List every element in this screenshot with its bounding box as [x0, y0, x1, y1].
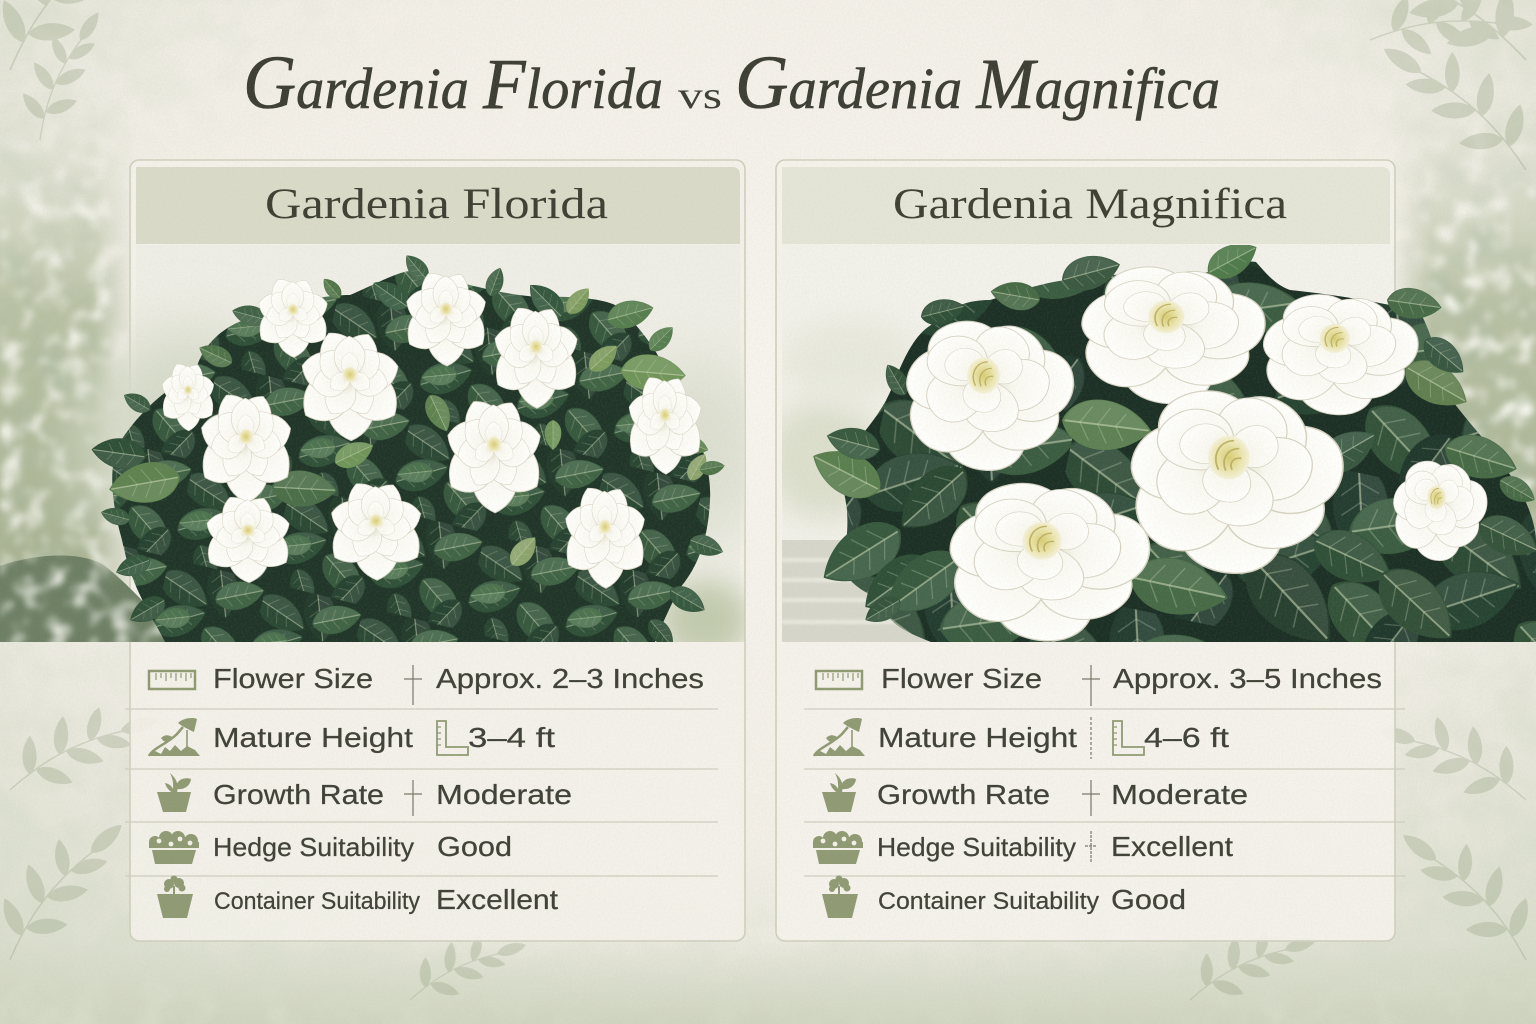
row: flower size [149, 663, 704, 705]
row: flower size: Approx. 3–5 Inches [1113, 663, 1382, 694]
title [243, 41, 1220, 125]
row: container suitability: Container Suitability [214, 888, 420, 915]
row: flower size: Flower Size [213, 663, 373, 694]
row: hedge suitability: Excellent [1111, 831, 1233, 862]
stone path [782, 540, 935, 642]
blurred foliage right of the panels [1396, 122, 1536, 539]
row: growth rate [157, 773, 572, 816]
row: container suitability [157, 876, 558, 918]
row: growth rate [822, 773, 1248, 816]
panel header [136, 167, 740, 244]
row: mature height: 4–6 ft [1144, 722, 1229, 753]
individual leaves [89, 250, 726, 653]
panel frame [776, 160, 1395, 941]
title: vs [678, 75, 722, 117]
row: mature height [149, 718, 555, 756]
row: mature height: Mature Height [213, 722, 413, 753]
photo: large gardenia shrub [765, 234, 1536, 663]
row: growth rate: Growth Rate [877, 779, 1050, 810]
row: mature height: Mature Height [878, 722, 1077, 753]
panel header: Gardenia Magnifica [893, 181, 1287, 228]
row: hedge suitability: Good [437, 831, 512, 862]
panel header: Gardenia Florida [265, 181, 608, 228]
row: hedge suitability [149, 831, 512, 864]
individual leaves [804, 234, 1536, 663]
photo: small gardenia shrub [0, 245, 770, 660]
panel: Gardenia Magnifica [765, 160, 1536, 941]
row: flower size: Flower Size [881, 663, 1042, 694]
white gardenia blooms [157, 266, 709, 588]
misty far bank [782, 399, 874, 527]
comparison table: Gardenia Magnifica [804, 663, 1405, 918]
row: growth rate: Moderate [436, 779, 572, 810]
title: Gardenia Florida [243, 41, 663, 125]
blurred foliage left of the panels [0, 122, 129, 587]
row: hedge suitability [813, 831, 1233, 864]
panel header [782, 167, 1390, 244]
white gardenia blooms [893, 255, 1491, 642]
foliage dome [112, 270, 710, 642]
title: Gardenia Magnifica [735, 41, 1220, 125]
row: container suitability: Container Suitability [878, 888, 1099, 915]
row: mature height: 3–4 ft [468, 722, 555, 753]
row: flower size: Approx. 2–3 Inches [436, 663, 704, 694]
foliage mass [836, 262, 1536, 642]
row: container suitability: Good [1111, 884, 1186, 915]
row: mature height [814, 717, 1229, 759]
comparison table: Gardenia Florida [125, 663, 718, 918]
row: flower size [816, 663, 1382, 706]
row: hedge suitability: Hedge Suitability [213, 832, 414, 862]
low shrub at lower left [0, 556, 165, 642]
row: container suitability [822, 876, 1186, 918]
row: hedge suitability: Hedge Suitability [877, 832, 1076, 862]
row: container suitability: Excellent [436, 884, 558, 915]
panel: Gardenia Florida [0, 160, 770, 941]
panel frame [130, 160, 745, 941]
row: growth rate: Moderate [1111, 779, 1248, 810]
row: growth rate: Growth Rate [213, 779, 384, 810]
